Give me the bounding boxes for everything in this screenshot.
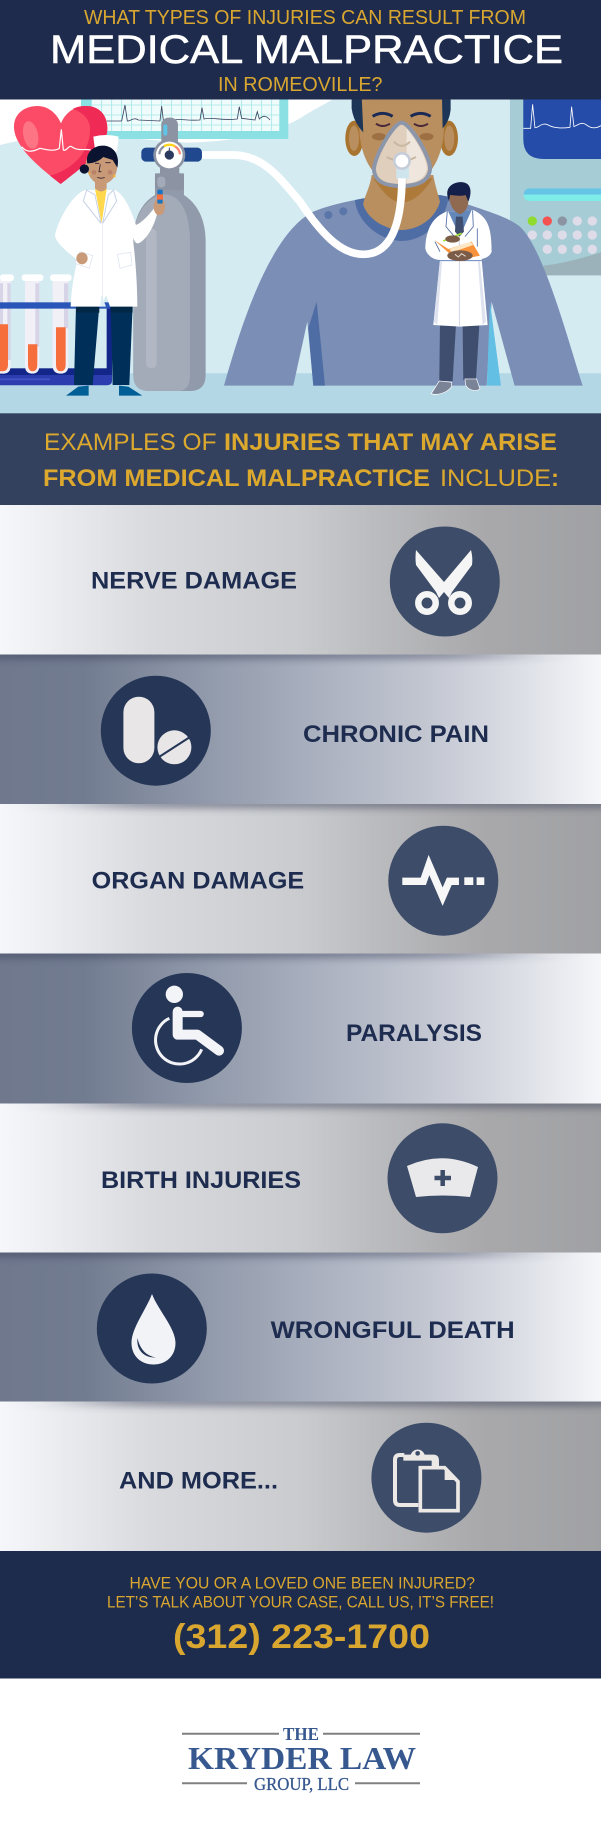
shirt (95, 189, 107, 223)
header panel (0, 0, 601, 100)
floor (0, 373, 601, 413)
lab coat (425, 210, 492, 327)
oxygen mask (374, 123, 430, 186)
label: paralysis: PARALYSIS (346, 1020, 482, 1047)
subheading line 1: INJURIES THAT MAY ARISE (224, 429, 557, 456)
icon: pulse (388, 826, 498, 936)
neck (363, 175, 440, 230)
indicator bar (524, 188, 601, 195)
illustration: patient with oxygen mask and medical staff (0, 95, 601, 417)
head (449, 195, 468, 214)
shirt and tie (448, 210, 472, 237)
nurse cap (93, 135, 119, 152)
subheading line 2: : (551, 465, 559, 492)
band 6: wrongful death (0, 1248, 601, 1402)
label: organ damage: ORGAN DAMAGE (92, 868, 304, 894)
label: nerve damage: NERVE DAMAGE (91, 568, 297, 594)
subheading line 2: FROM MEDICAL MALPRACTICE (43, 465, 430, 492)
neck (95, 182, 107, 192)
oxygen tube (202, 151, 312, 216)
ECG chart (81, 98, 288, 139)
logo: the kryder law group: KRYDER LAW (188, 1740, 416, 1776)
band 4: paralysis (0, 949, 601, 1104)
hair (352, 95, 363, 132)
band 5: birth injuries (0, 1099, 601, 1252)
test tubes and rack (0, 274, 112, 385)
header line 1: WHAT TYPES OF INJURIES CAN RESULT FROM (84, 7, 526, 29)
subheading line 2: INCLUDE (440, 465, 551, 492)
indicator lights (528, 216, 597, 254)
nurse (55, 135, 165, 396)
doctor (425, 182, 492, 394)
icon: pills (101, 676, 211, 786)
heart (14, 106, 107, 184)
label: and more: AND MORE... (119, 1468, 278, 1494)
band 1: nerve damage (0, 505, 601, 654)
phone number: (312) 223-1700 (173, 1618, 430, 1656)
patient (224, 95, 583, 386)
main title: MEDICAL MALPRACTICE (50, 28, 563, 72)
head (86, 157, 118, 184)
hand (76, 252, 88, 264)
footer text line 1: HAVE YOU OR A LOVED ONE BEEN INJURED? (130, 1575, 475, 1593)
vial (157, 190, 163, 204)
trousers (439, 326, 456, 381)
head (359, 95, 444, 189)
band 2: chronic pain (0, 650, 601, 804)
face features (373, 113, 431, 116)
logo: the kryder law group: GROUP, LLC (254, 1774, 349, 1794)
icon: wheelchair (132, 973, 242, 1083)
medical equipment panel (510, 95, 601, 275)
logo: the kryder law group (182, 1724, 420, 1794)
icon: clipboard and document (371, 1423, 481, 1533)
label: wrongful death: WRONGFUL DEATH (271, 1317, 515, 1344)
pressure gauge (153, 141, 186, 168)
oxygen tank (133, 118, 206, 391)
legs (74, 306, 99, 385)
subheading line 1 (44, 429, 557, 456)
icon: nurse cap (388, 1123, 498, 1233)
footer call to action (0, 1551, 601, 1678)
label: birth injuries: BIRTH INJURIES (101, 1167, 301, 1194)
ears (345, 121, 363, 156)
band 7: and more (0, 1397, 601, 1551)
collar (355, 195, 448, 241)
lab coat (55, 190, 157, 307)
wall highlight (0, 95, 332, 145)
band 3: organ damage (0, 799, 601, 954)
shoes (431, 381, 452, 394)
label: chronic pain: CHRONIC PAIN (303, 721, 489, 748)
icon: scissors (390, 526, 500, 636)
shirt (224, 195, 583, 386)
subheading line 1: EXAMPLES OF (44, 429, 216, 456)
subheading banner (0, 414, 601, 505)
header line 3: IN ROMEOVILLE? (218, 74, 382, 96)
notebook (434, 240, 480, 258)
shoes (66, 386, 89, 396)
icon: blood drop (97, 1274, 207, 1384)
footer text line 2: LET’S TALK ABOUT YOUR CASE, CALL US, IT’S FREE! (107, 1594, 494, 1612)
logo: the kryder law group: THE (283, 1724, 319, 1744)
monitor screen (523, 95, 601, 159)
